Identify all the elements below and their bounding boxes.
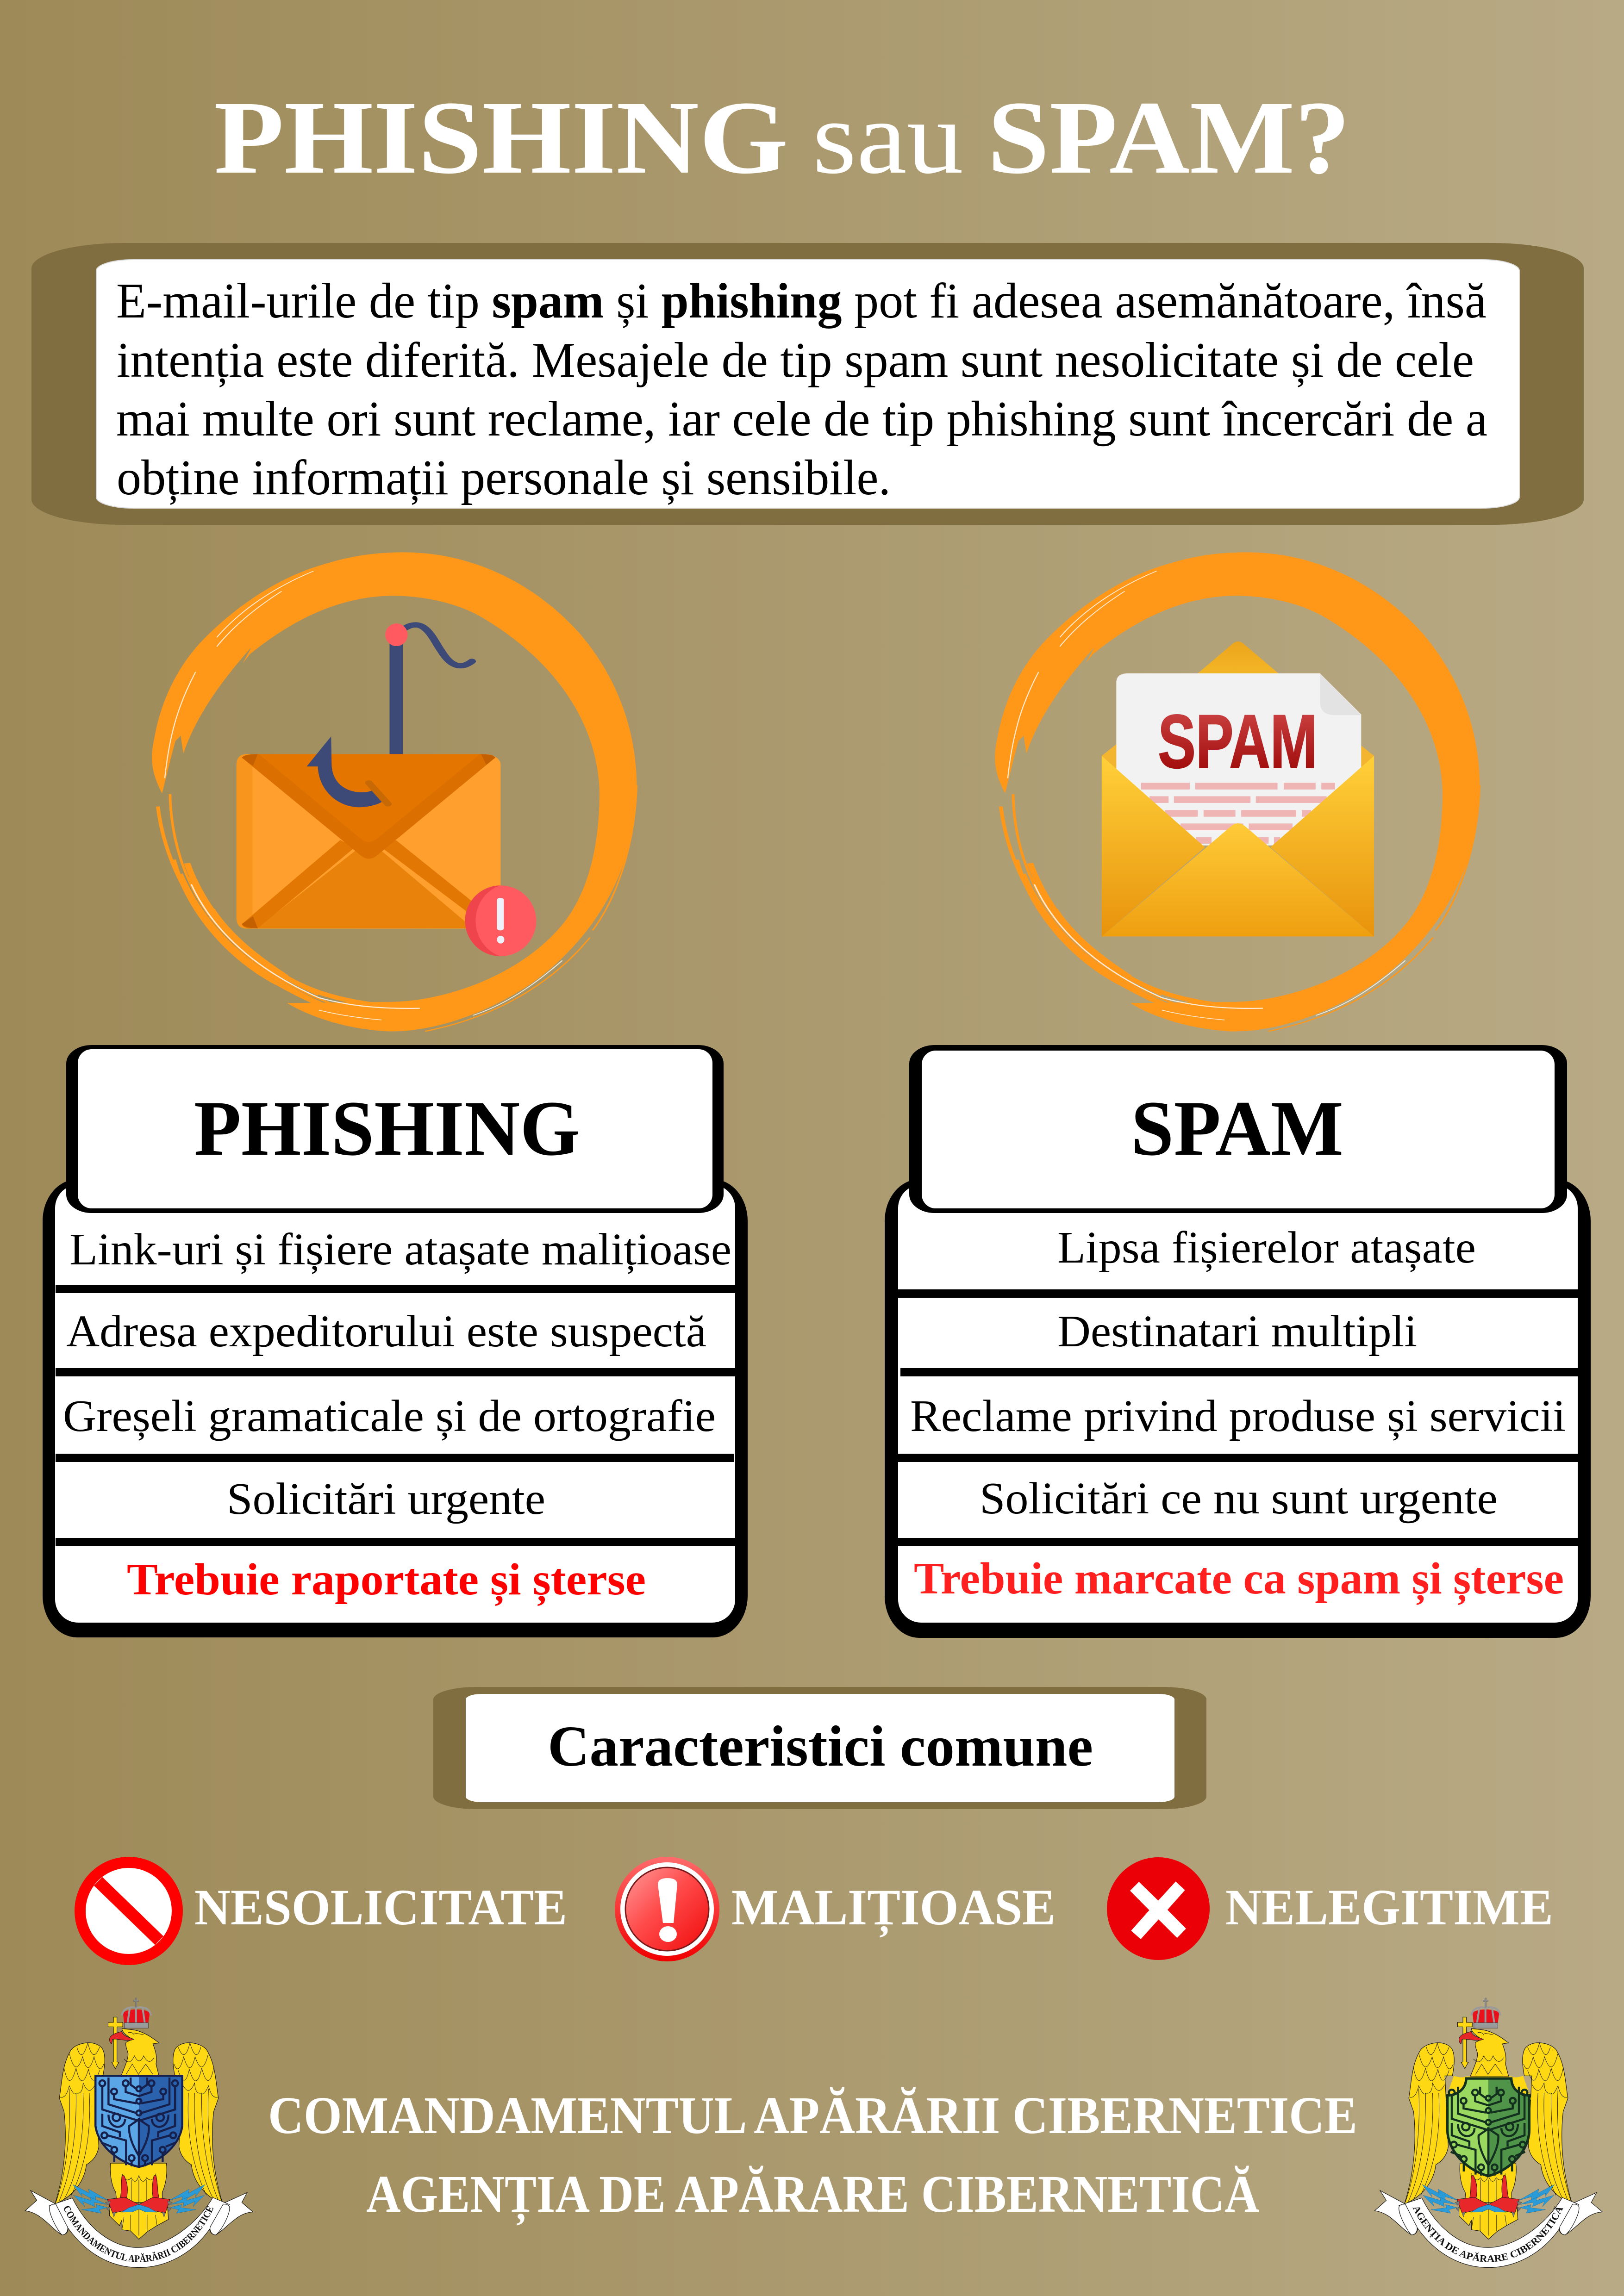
icon: red x: [1107, 1857, 1210, 1960]
spam list items: Solicitări ce nu sunt urgente: [980, 1474, 1498, 1524]
spam list items: Lipsa fișierelor atașate: [1057, 1223, 1476, 1273]
spam list items: Reclame privind produse și servicii: [910, 1391, 1566, 1441]
item: malitioase: [615, 1857, 1056, 1961]
intro text: obține informații personale și sensibile.: [117, 450, 891, 505]
intro text: [116, 274, 1487, 505]
spam heading: SPAM: [1131, 1085, 1343, 1172]
heading: common characteristics: Caracteristici comune: [548, 1715, 1093, 1779]
item: nesolicitate: NESOLICITATE: [194, 1879, 567, 1935]
ribbon: AGENȚIA DE APĂRARE CIBERNETICĂ: [1411, 2203, 1566, 2265]
intro text: E-mail-urile de tip spam și phishing pot fi adesea asemănătoare, însă: [116, 274, 1487, 329]
footer organisation names: AGENȚIA DE APĂRARE CIBERNETICĂ: [366, 2165, 1259, 2226]
intro text: intenția este diferită. Mesajele de tip spam sunt nesolicitate și de cele: [117, 333, 1474, 388]
phishing list box: [43, 1179, 748, 1637]
panel: introduction: [31, 243, 1584, 525]
ribbon: [1374, 2190, 1602, 2268]
intro text: mai multe ori sunt reclame, iar cele de tip phishing sunt încercări de a: [116, 392, 1487, 447]
icon: prohibition sign: [75, 1857, 183, 1965]
item: nelegitime: [1107, 1857, 1553, 1960]
phishing list items: [63, 1225, 731, 1606]
phishing heading: PHISHING: [194, 1085, 580, 1172]
phishing heading: [66, 1045, 724, 1213]
spam heading: [909, 1045, 1567, 1213]
icon: phishing ring with hooked envelope: [152, 552, 637, 1031]
spam list box: [885, 1179, 1591, 1638]
item: malitioase: MALIȚIOASE: [731, 1879, 1056, 1937]
crest: cyber defence agency: [1374, 1998, 1602, 2268]
icon: spam ring with envelope: [995, 552, 1480, 1031]
title: SPAM?: [987, 80, 1350, 195]
icon: spam envelope: [1102, 641, 1374, 936]
icon: hooked envelope: [237, 623, 536, 956]
ribbon: [25, 2190, 253, 2268]
spam list items: Destinatari multipli: [1057, 1307, 1417, 1356]
icon: spam envelope: SPAM: [1158, 699, 1318, 784]
panel: phishing: [43, 1045, 748, 1637]
spam list items: [910, 1223, 1566, 1605]
icon: alert sign: [615, 1857, 719, 1961]
title: [214, 80, 1350, 195]
phishing list items: Greșeli gramaticale și de ortografie: [63, 1391, 716, 1441]
phishing list items: Trebuie raportate și șterse: [127, 1555, 646, 1606]
title: sau: [812, 80, 963, 195]
title: PHISHING: [214, 80, 788, 195]
footer organisation names: [268, 2086, 1357, 2226]
phishing list items: Solicitări urgente: [227, 1474, 545, 1524]
item: nelegitime: NELEGITIME: [1225, 1879, 1553, 1935]
panel: spam: [885, 1045, 1591, 1638]
phishing list items: Adresa expeditorului este suspectă: [66, 1307, 706, 1356]
item: nesolicitate: [75, 1857, 567, 1965]
heading: common characteristics: [433, 1687, 1206, 1809]
ribbon: COMANDAMENTUL APĂRĂRII CIBERNETICE: [61, 2203, 216, 2265]
phishing list items: Link-uri și fișiere atașate malițioase: [69, 1225, 731, 1275]
footer organisation names: COMANDAMENTUL APĂRĂRII CIBERNETICE: [268, 2086, 1357, 2145]
crest: cyber defence command: [25, 1998, 253, 2268]
spam list items: Trebuie marcate ca spam și șterse: [914, 1554, 1564, 1605]
